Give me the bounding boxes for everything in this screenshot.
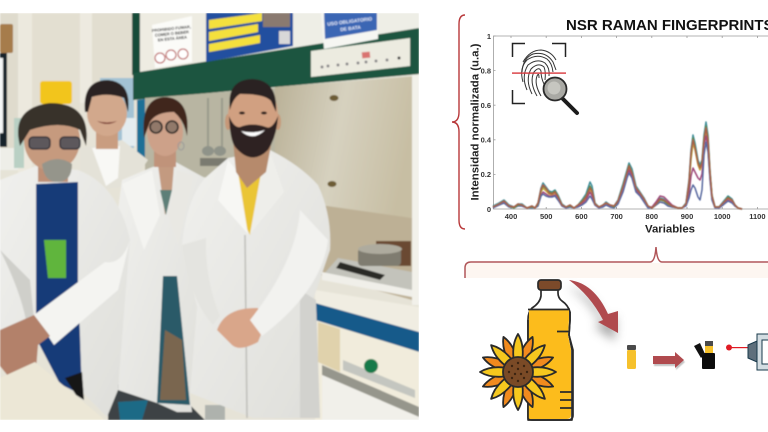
sign: mandatory lab coat: USO OBLIGATORIO [327, 16, 373, 28]
yellow petals [480, 334, 556, 410]
chart: NSR Raman fingerprints [470, 17, 768, 236]
poster: no smoking: COMER O BEBER [155, 29, 189, 38]
x axis tick labels: 1100 [749, 212, 766, 221]
x axis tick labels: 900 [681, 212, 693, 221]
x axis tick labels: 500 [540, 212, 552, 221]
bottle glass [528, 289, 572, 420]
y axis tick labels: 0.8 [481, 66, 491, 76]
y axis tick labels: 0.2 [481, 170, 491, 179]
orange petals [481, 335, 555, 409]
green knob [364, 359, 378, 373]
oil [528, 310, 571, 419]
poster: no smoking: PROHIBIDO FUMAR, [151, 24, 191, 33]
photo: research team in laboratory [0, 13, 419, 420]
magnifier [544, 78, 577, 113]
spectra lines [493, 122, 742, 209]
chart axes [494, 36, 768, 209]
y axis tick labels: 0 [487, 205, 491, 214]
poster: no smoking: EN ESTA ÁREA [158, 34, 187, 43]
x axis tick labels: 700 [610, 212, 623, 221]
chart title: NSR RAMAN FINGERPRINTS [566, 17, 768, 34]
glasses [29, 137, 80, 149]
x axis tick labels: 1000 [714, 212, 731, 221]
arrow: curved from bottle to vial [567, 280, 618, 341]
y axis title: Intensidad normalizada (u.a.) [470, 43, 482, 200]
fume hood control panel [311, 38, 410, 77]
person: man with beard, front right [182, 79, 330, 420]
bottle outline [528, 310, 573, 420]
x axis title: Variables [645, 224, 695, 236]
icon: sunflower oil bottle [528, 280, 573, 420]
bottom bracket [465, 247, 768, 278]
person: man in back [80, 80, 148, 190]
person: man with glasses, front left [0, 103, 130, 420]
flower centre [503, 357, 533, 387]
icon: sample vial [627, 345, 636, 369]
sign: mandatory lab coat [321, 13, 378, 49]
glasses [150, 121, 178, 133]
scan line [512, 72, 566, 74]
icon: vial in holder [694, 341, 715, 369]
person: woman with glasses [108, 97, 205, 420]
left red brace [452, 15, 465, 229]
x axis tick labels: 800 [646, 212, 658, 221]
y axis tick labels [481, 32, 492, 214]
x axis tick labels: 400 [505, 212, 517, 221]
icon: sunflower [480, 334, 556, 410]
sign: mandatory lab coat: DE BATA [340, 25, 362, 33]
arrow: vial to holder [653, 352, 685, 370]
scan frame corners [512, 44, 566, 104]
poster: no smoking [151, 16, 192, 68]
icon: laser beam [726, 344, 749, 350]
poster: blue and yellow information [206, 13, 293, 62]
y axis tick labels: 1 [487, 32, 491, 41]
icon: Raman spectrometer [748, 334, 768, 370]
x axis tick labels [504, 214, 766, 219]
y axis tick labels: 0.6 [481, 101, 491, 110]
bottle cap [538, 280, 561, 290]
y axis tick labels: 0.4 [481, 136, 492, 144]
fingerprint ridges [522, 50, 556, 96]
laboratory background [0, 13, 419, 420]
x axis tick labels: 600 [575, 212, 588, 221]
icon: fingerprint scan with magnifier [512, 44, 577, 113]
